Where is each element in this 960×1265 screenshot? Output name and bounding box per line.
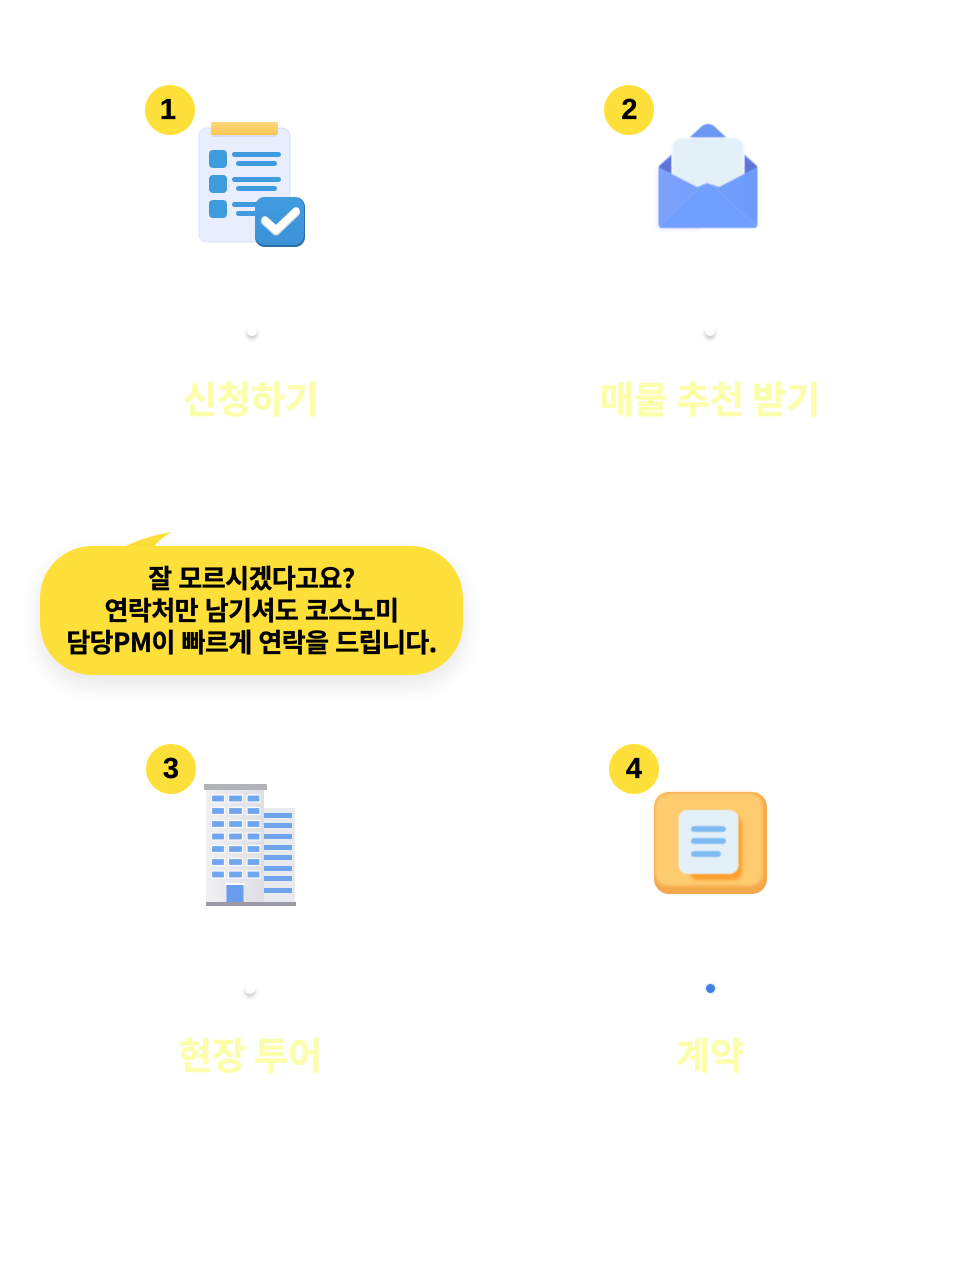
step 3 marker dot xyxy=(245,984,255,994)
step 1 badge: 1 xyxy=(160,94,176,126)
icon: office building xyxy=(204,784,296,906)
step 4 title: 계약 xyxy=(676,1026,744,1080)
bubble text xyxy=(66,559,437,660)
step 2 marker dot xyxy=(705,326,715,336)
step 1 marker dot xyxy=(247,326,257,336)
step 3 badge xyxy=(146,744,196,794)
bubble body xyxy=(40,546,463,675)
bubble tail xyxy=(126,532,172,546)
step 1 badge xyxy=(145,85,195,135)
step 4 badge xyxy=(609,744,659,794)
step 3 badge: 3 xyxy=(163,753,179,785)
step 2 badge: 2 xyxy=(621,94,638,126)
step 4 active marker dot xyxy=(706,984,714,992)
icon: checklist clipboard xyxy=(198,122,305,247)
step 2 badge xyxy=(604,85,654,135)
step 1 title: 신청하기 xyxy=(183,370,319,424)
bubble text: 담당PM이 빠르게 연락을 드립니다. xyxy=(66,623,437,660)
speech bubble callout xyxy=(36,532,468,690)
bubble text: 잘 모르시겠다고요? xyxy=(148,559,355,596)
step 3 title: 현장 투어 xyxy=(178,1026,322,1080)
step 4 badge: 4 xyxy=(626,753,642,785)
icon: open envelope xyxy=(656,123,758,230)
step 2 title: 매물 추천 받기 xyxy=(600,370,820,424)
icon: contract document card xyxy=(652,790,767,894)
bubble text: 연락처만 남기셔도 코스노미 xyxy=(105,591,398,628)
